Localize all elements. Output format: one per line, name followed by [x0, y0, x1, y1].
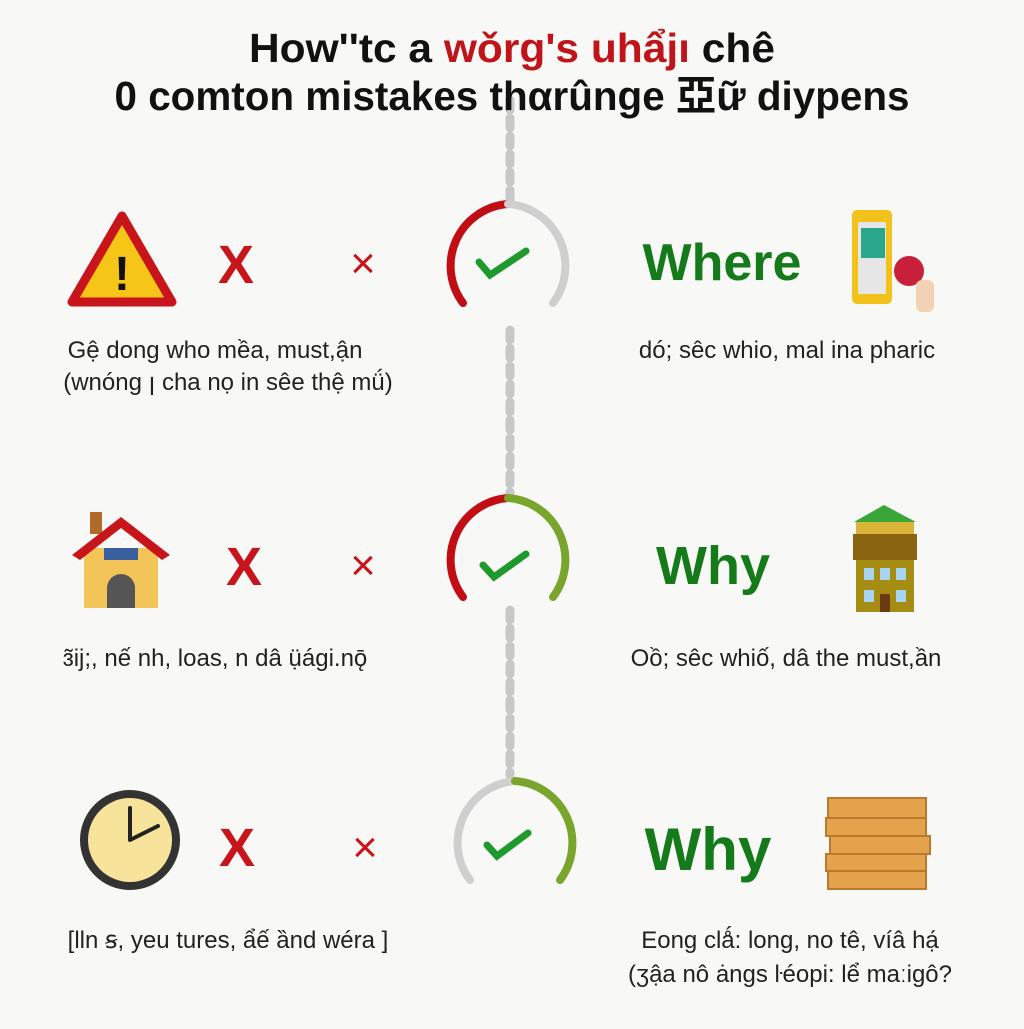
- text: row3 right: (ʒậa nô ȧngs ŀéopi: lể maːigô?: [628, 961, 952, 988]
- icon: phone with fruit: [852, 210, 934, 312]
- text: row2 right: Oồ; sêc whiố, dâ the must,ần: [631, 645, 941, 672]
- mark: small x: ×: [350, 239, 376, 288]
- chain connector: [506, 100, 514, 775]
- heading: Why: Why: [656, 536, 770, 596]
- mark: small x: ×: [350, 541, 376, 590]
- mark: large X: X: [226, 537, 262, 597]
- gauge with check: [458, 781, 572, 880]
- icon: house: [72, 512, 170, 608]
- icon: stacked planks: [826, 798, 930, 889]
- row 1: [63, 204, 935, 396]
- icon: warning triangle: !: [114, 248, 130, 301]
- text: row1 left: Gệ dong who mềa, must,ận: [68, 337, 362, 364]
- text: row2 left: ɜ̃ij;, nế nh, loas, n dâ ụ̈ági.nǭ: [63, 645, 367, 672]
- gauge with check: [451, 498, 565, 597]
- mark: small x: ×: [352, 823, 378, 872]
- text: row1 left: [63, 337, 393, 396]
- text: row3 right: Eong clǻ: long, no tê, víâ hạ́: [641, 926, 939, 954]
- text: row3 right: [628, 926, 952, 988]
- icon: warning triangle: [72, 216, 172, 302]
- text: row1 left: (wnóng ꞁ cha nọ in sêe thệ mǘ): [63, 369, 393, 396]
- mark: large X: X: [218, 235, 254, 295]
- text: row1 right: dó; sêc whio, mal ina pharic: [639, 337, 935, 364]
- heading: Where: Where: [643, 234, 801, 292]
- text: row3 left: [lln ꞩ, yeu tures, ẩế ȁnd wéra ]: [68, 927, 388, 954]
- row 2: [63, 498, 941, 672]
- icon: building: [853, 505, 917, 612]
- row 3: [68, 781, 952, 988]
- title: 0 comton mistakes thαrûnge 亞ữ diypens: [114, 73, 910, 119]
- mark: large X: X: [219, 818, 255, 878]
- gauge with check: [451, 204, 565, 303]
- title: How''tc a wǒrg's uhẩjı chê: [249, 25, 775, 71]
- title: [114, 25, 910, 119]
- heading: Why: Why: [645, 816, 772, 883]
- icon: clock: [80, 790, 180, 890]
